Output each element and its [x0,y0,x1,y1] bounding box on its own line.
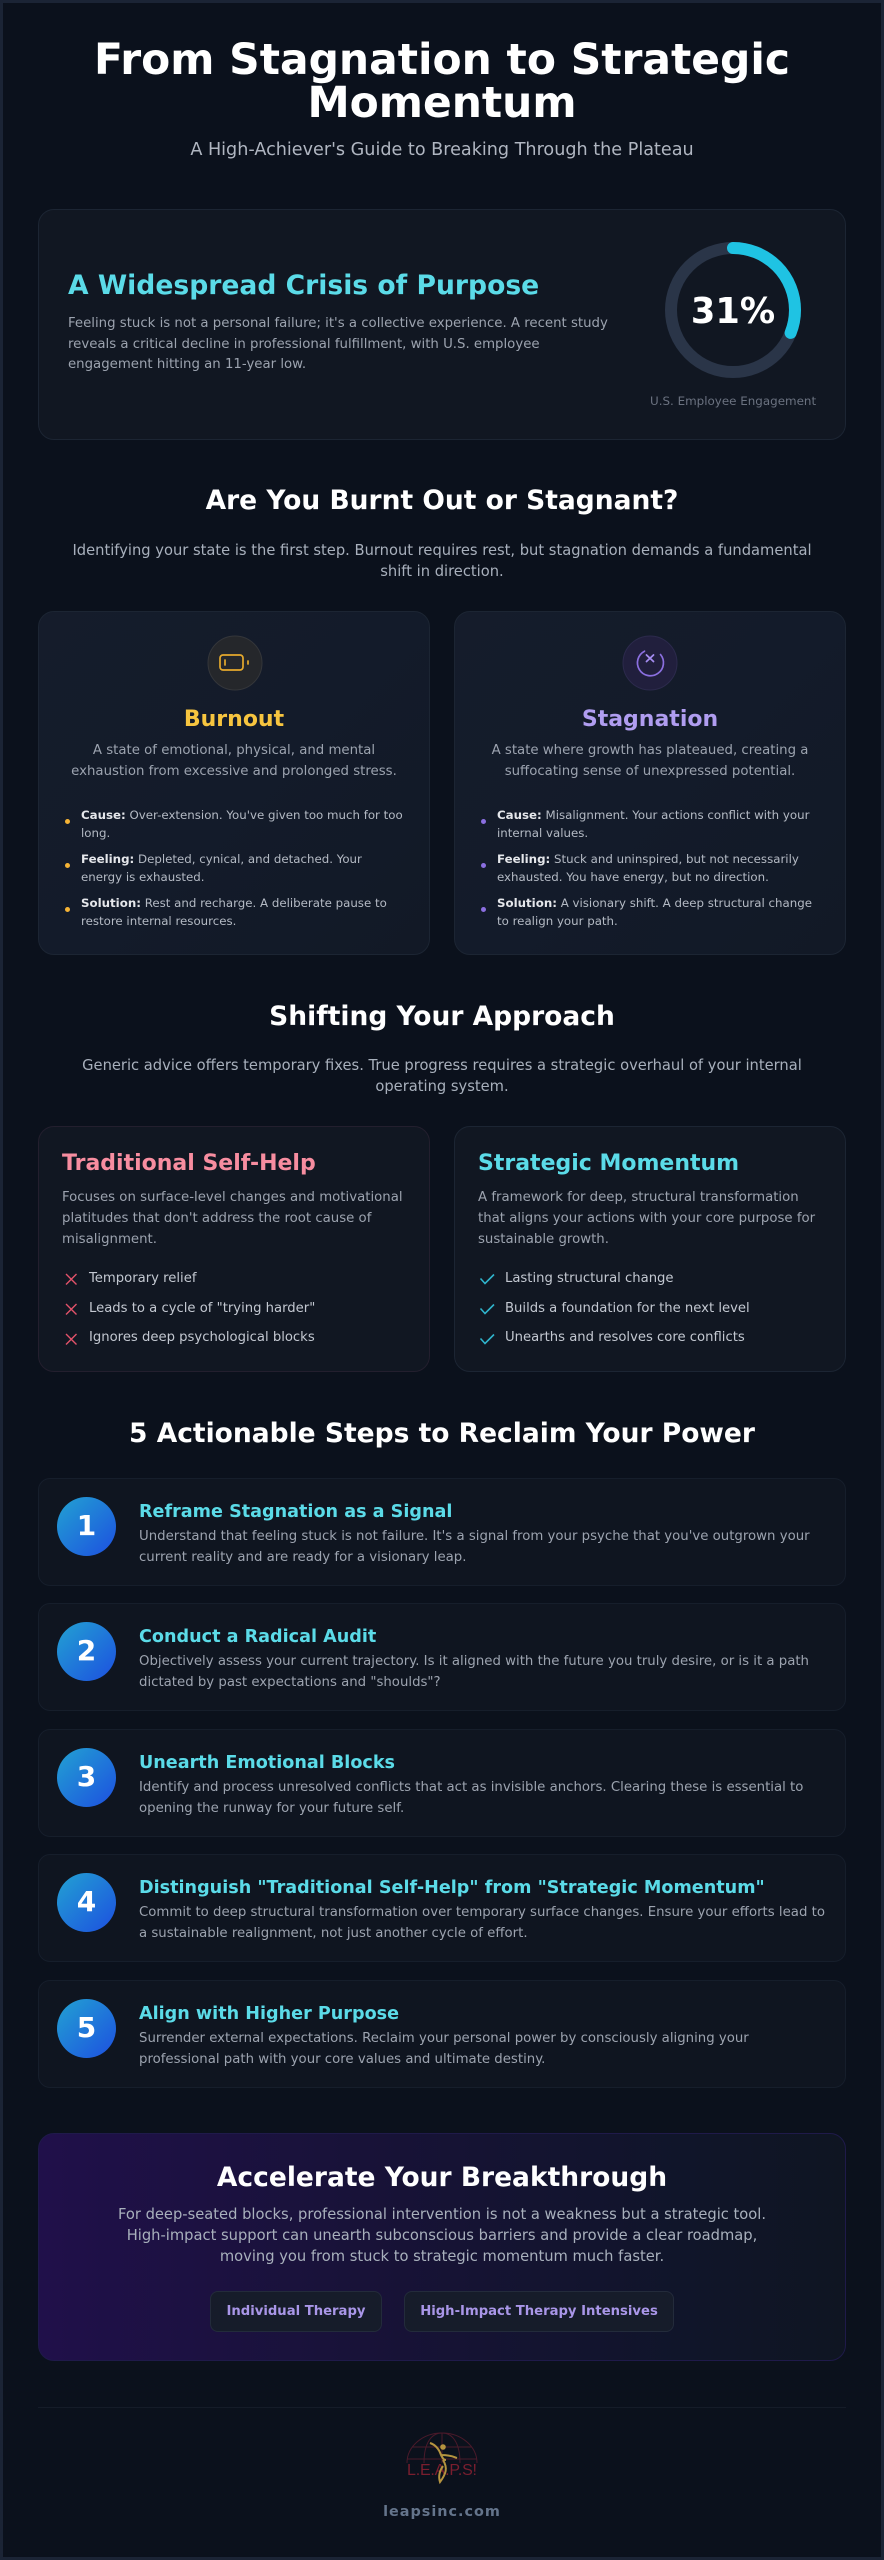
list: traditional points: Leads to a cycle of "trying harder" [89,1301,315,1316]
list: strategic points [480,1271,750,1345]
text: burnout description: exhaustion from excessive and prolonged stress. [71,764,397,779]
title: Momentum [307,78,577,127]
heading: five steps: 5 Actionable Steps to Reclaim Your Power [129,1418,755,1449]
text: strategic description: A framework for deep, structural transformation [478,1190,799,1205]
icon: number 5: 5 [77,2011,96,2044]
list: strategic points: Lasting structural change [505,1271,674,1286]
list: traditional points: Ignores deep psychological blocks [89,1330,315,1345]
list: stagnation points: Cause: Misalignment. Your actions conflict with your [497,808,809,822]
icon: number 5 [57,1999,116,2058]
step 1 title: Reframe Stagnation as a Signal [139,1502,452,1522]
text: traditional description: misalignment. [62,1232,157,1247]
heading: burnt out or stagnant: Are You Burnt Out or Stagnant? [206,485,678,516]
icon: number 2 [57,1622,116,1681]
icon: number 1 [57,1497,116,1556]
panel: traditional self-help [38,1126,430,1372]
icon: number 2: 2 [77,1634,96,1667]
text: approach intro [82,1057,802,1095]
heading: shifting approach: Shifting Your Approach [269,1001,615,1032]
text: strategic description: that aligns your actions with your core purpose for [478,1211,815,1226]
heading: crisis: A Widespread Crisis of Purpose [68,270,539,301]
icon: stalled circle [622,636,678,690]
step 1 text [139,1529,810,1565]
text: burnout intro [72,542,812,580]
list: stagnation points: to realign your path. [497,914,618,928]
step 5 text: Surrender external expectations. Reclaim your personal power by consciously aligning your [139,2031,749,2046]
step 2 text: Objectively assess your current trajectory. Is it aligned with the future you truly desire, or is it a path [139,1654,809,1669]
text: burnout intro: shift in direction. [380,563,504,580]
panel: strategic momentum [454,1126,846,1372]
panel: step 3 [38,1729,846,1837]
text: burnout intro: Identifying your state is the first step. Burnout requires rest, but stagnation demands a fundamental [72,542,812,559]
text: crisis body: Feeling stuck is not a personal failure; it's a collective experience. A recent study [68,316,608,331]
step 4 text: a sustainable realignment, not just another cycle of effort. [139,1926,528,1941]
panel: crisis of purpose [38,209,846,440]
chart: 31% engagement ring: 31% [691,291,775,332]
text: strategic description [478,1190,816,1247]
list: burnout points: Feeling: Depleted, cynical, and detached. Your [81,852,362,866]
text: approach intro: operating system. [375,1078,509,1095]
icon: number 4 [57,1873,116,1932]
step 3 text: Identify and process unresolved conflicts that act as invisible anchors. Clearing these is essential to [139,1780,803,1795]
step 5 text: professional path with your core values and ultimate destiny. [139,2052,545,2067]
text: CTA body: moving you from stuck to strategic momentum much faster. [220,2248,664,2265]
list: strategic points: Builds a foundation for the next level [505,1301,750,1316]
panel: stagnation [454,611,846,955]
list: burnout points [65,808,403,928]
step 4 text [139,1905,825,1941]
text: CTA body: High-impact support can unearth subconscious barriers and provide a clear roadmap, [127,2227,757,2244]
list: strategic points: Unearths and resolves core conflicts [505,1330,745,1345]
step 2 text: dictated by past expectations and "shoulds"? [139,1675,441,1690]
list: burnout points: restore internal resources. [81,914,236,928]
list: stagnation points: Feeling: Stuck and uninspired, but not necessarily [497,852,799,866]
icon: low battery [208,636,262,690]
icon: number 4: 4 [77,1885,96,1918]
icon: number 3: 3 [77,1760,96,1793]
text: stagnation description: suffocating sense of unexpressed potential. [505,764,795,779]
heading: stagnation: Stagnation [582,707,718,732]
icon: number 1: 1 [77,1509,96,1542]
list: burnout points: energy is exhausted. [81,870,205,884]
panel: step 1 [38,1478,846,1586]
title: From Stagnation to Strategic [94,35,790,84]
text: traditional description [62,1190,403,1247]
text: traditional description: Focuses on surface-level changes and motivational [62,1190,403,1205]
text: crisis body [68,316,608,372]
chart: 31% engagement ring [665,242,801,378]
text: traditional description: platitudes that don't address the root cause of [62,1211,371,1226]
logo: L.E.A.P.S! [406,2432,478,2484]
text: stagnation description [492,743,808,779]
list: burnout points: Cause: Over-extension. You've given too much for too [81,808,403,822]
text: approach intro: Generic advice offers temporary fixes. True progress requires a strategic overhaul of your internal [82,1057,802,1074]
heading: strategic: Strategic Momentum [478,1151,739,1176]
list: stagnation points [481,808,812,928]
step 5 text [139,2031,749,2067]
button: therapy intensives [404,2291,674,2332]
heading: burnout: Burnout [184,707,284,732]
step 3 text [139,1780,803,1816]
panel: call to action [38,2133,846,2361]
step 4 title: Distinguish "Traditional Self-Help" from "Strategic Momentum" [139,1878,765,1898]
step 5 title: Align with Higher Purpose [139,2004,399,2024]
panel: step 2 [38,1603,846,1711]
step 1 text: Understand that feeling stuck is not failure. It's a signal from your psyche that you've outgrown your [139,1529,810,1544]
button: therapy intensives: High-Impact Therapy Intensives [420,2304,658,2319]
step 1 text: current reality and are ready for a visionary leap. [139,1550,466,1565]
text: CTA body [118,2206,766,2265]
button: individual therapy [210,2291,382,2332]
step 3 text: opening the runway for your future self. [139,1801,404,1816]
button: individual therapy: Individual Therapy [226,2304,365,2319]
panel: step 5 [38,1980,846,2088]
list: burnout points: Solution: Rest and recharge. A deliberate pause to [81,896,387,910]
footer website: leapsinc.com [383,2504,501,2520]
text: crisis body: reveals a critical decline in professional fulfillment, with U.S. employee [68,337,540,352]
step 3 title: Unearth Emotional Blocks [139,1753,395,1773]
list: stagnation points: internal values. [497,826,588,840]
chart label: U.S. Employee Engagement [650,394,816,408]
text: CTA body: For deep-seated blocks, professional intervention is not a weakness but a strategic tool. [118,2206,766,2223]
text: burnout description: A state of emotional, physical, and mental [93,743,375,758]
step 2 title: Conduct a Radical Audit [139,1627,376,1647]
text: burnout description [71,743,397,779]
heading: traditional: Traditional Self-Help [62,1151,316,1176]
title [94,35,790,127]
text: crisis body: engagement hitting an 11-year low. [68,357,306,372]
panel: step 4 [38,1854,846,1962]
list: stagnation points: Solution: A visionary shift. A deep structural change [497,896,812,910]
step 4 text: Commit to deep structural transformation over temporary surface changes. Ensure your efforts lead to [139,1905,825,1920]
icon: number 3 [57,1748,116,1807]
step 2 text [139,1654,809,1690]
logo: L.E.A.P.S!: L.E.A.P.S! [407,2462,477,2479]
list: traditional points [66,1271,315,1345]
list: traditional points: Temporary relief [89,1271,196,1286]
panel: burnout [38,611,430,955]
list: stagnation points: exhausted. You have energy, but no direction. [497,870,769,884]
text: strategic description: sustainable growth. [478,1232,609,1247]
heading: accelerate: Accelerate Your Breakthrough [217,2162,667,2193]
subtitle: A High-Achiever's Guide to Breaking Through the Plateau [190,140,694,160]
list: burnout points: long. [81,826,110,840]
text: stagnation description: A state where growth has plateaued, creating a [492,743,808,758]
